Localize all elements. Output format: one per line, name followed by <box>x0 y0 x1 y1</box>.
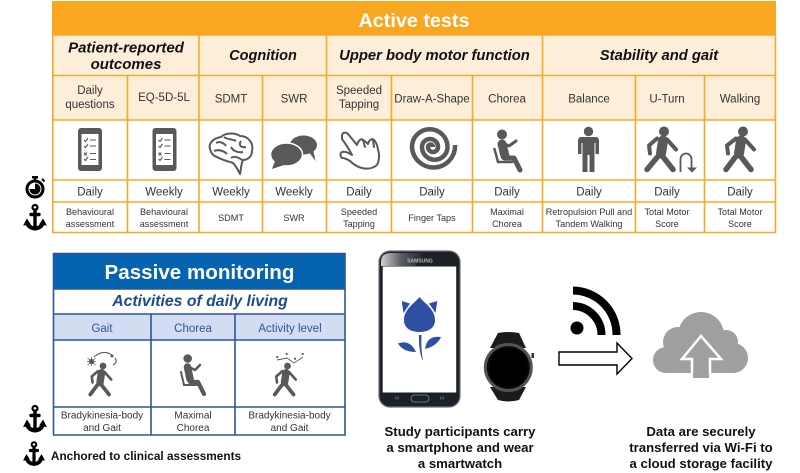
icon: tapping hand <box>340 133 379 169</box>
test frequency row: Daily <box>727 186 753 198</box>
test names: Daily <box>77 85 103 97</box>
anchor assessments: and Gait <box>83 423 121 434</box>
test frequency row: Daily <box>77 186 103 198</box>
clinical anchor row: assessment <box>140 219 189 229</box>
clinical anchor row: Maximal <box>490 207 524 217</box>
column headings <box>91 323 322 335</box>
icon: wi-fi <box>570 290 617 335</box>
icon: anchor, active tests <box>24 205 46 228</box>
icon: gait with dizziness marks <box>87 352 116 394</box>
category headings: Patient-reported <box>68 40 185 56</box>
anchor assessments: Bradykinesia-body <box>248 410 331 422</box>
clinical anchor row: Total Motor <box>645 207 689 217</box>
phone brand: SAMSUNG <box>407 258 433 264</box>
icon: smartwatch <box>485 332 534 402</box>
test names: SWR <box>281 94 307 106</box>
tulip logo <box>398 297 441 361</box>
anchor assessments: Maximal <box>174 410 212 422</box>
category headings: outcomes <box>91 56 161 73</box>
caption: data transfer: a cloud storage facility <box>630 456 773 471</box>
column heading background <box>54 314 344 340</box>
category headings: Upper body motor function <box>339 48 530 64</box>
test names: Speeded <box>336 85 382 97</box>
test names: Draw-A-Shape <box>394 94 470 106</box>
test frequency row: Daily <box>419 186 445 198</box>
legend: anchored to clinical assessments <box>24 442 242 464</box>
test frequency row: Weekly <box>145 186 183 198</box>
clinical anchor row: Finger Taps <box>408 213 456 223</box>
icon: phone checklist, EQ-5D-5L <box>152 128 176 171</box>
anchor assessments: Bradykinesia-body <box>61 410 143 422</box>
icon: cloud upload <box>653 312 748 378</box>
anchor assessments <box>61 410 331 434</box>
column headings: Chorea <box>174 323 212 335</box>
test frequency row: Daily <box>494 186 520 198</box>
icon: phone checklist, daily questions <box>78 128 102 171</box>
test names <box>65 85 760 111</box>
icon: standing person, balance <box>578 127 599 172</box>
test frequency row <box>77 186 753 198</box>
arrow to cloud <box>559 343 632 374</box>
clinical anchor row: Total Motor <box>718 207 762 217</box>
anchor assessments: and Gait <box>271 423 309 434</box>
category and test name background <box>53 35 775 120</box>
caption: data transfer: transferred via Wi-Fi to <box>629 440 773 455</box>
test names: Walking <box>720 94 760 106</box>
test names: questions <box>65 99 115 111</box>
clinical anchor row: Behavioural <box>140 207 188 217</box>
panel: passive monitoring <box>53 253 345 435</box>
test names: Balance <box>568 94 610 106</box>
test frequency row: Daily <box>346 186 372 198</box>
icon: walking person <box>726 126 754 170</box>
clinical anchor row: Chorea <box>492 219 523 229</box>
icon: seated person <box>181 354 204 394</box>
active tests header band <box>52 1 776 35</box>
clinical anchor row: Tandem Walking <box>556 219 622 229</box>
test frequency row: Daily <box>576 186 602 198</box>
heading: passive monitoring: Passive monitoring <box>105 261 294 284</box>
category headings: Stability and gait <box>600 48 719 64</box>
icon: activity level person <box>275 353 304 394</box>
clinical anchor row: Score <box>728 219 752 229</box>
clinical anchor row: SWR <box>283 213 305 223</box>
category headings: Cognition <box>229 48 297 64</box>
caption: data transfer <box>629 424 773 471</box>
clinical anchor row: assessment <box>66 219 115 229</box>
clinical anchor row: Tapping <box>343 219 375 229</box>
test names: SDMT <box>215 94 247 106</box>
test names: Chorea <box>488 94 526 106</box>
caption: study participants: Study participants carry <box>385 424 536 439</box>
test frequency row: Weekly <box>212 186 250 198</box>
test frequency row: Daily <box>654 186 680 198</box>
icon: speech bubbles <box>270 136 317 169</box>
icon: stopwatch <box>27 176 44 197</box>
caption: data transfer: Data are securely <box>646 424 756 439</box>
icon: walking person with U-turn arrow <box>647 126 697 172</box>
icon: anchor, legend <box>24 442 44 464</box>
anchor assessments: Chorea <box>177 423 210 434</box>
clinical anchor row: Behavioural <box>66 207 114 217</box>
heading: active tests: Active tests <box>358 10 470 32</box>
subheading: activities of daily living: Activities of daily living <box>111 293 288 310</box>
icon: brain <box>210 134 252 174</box>
column headings: Gait <box>91 323 113 335</box>
clinical anchor row: Retropulsion Pull and <box>546 207 632 217</box>
test names: Tapping <box>339 99 379 111</box>
icon: seated person, chorea <box>494 130 520 170</box>
caption: study participants: a smartphone and wear <box>386 440 534 455</box>
legend text: Anchored to clinical assessments <box>51 449 242 463</box>
test frequency row: Weekly <box>275 186 313 198</box>
clinical anchor row: SDMT <box>218 213 244 223</box>
column headings: Activity level <box>258 323 322 335</box>
passive monitoring header band <box>53 253 345 289</box>
icon: anchor, passive monitoring <box>24 406 46 430</box>
caption: study participants: a smartwatch <box>418 456 502 471</box>
test names: U-Turn <box>649 94 685 106</box>
icon: spiral <box>412 129 455 167</box>
clinical anchor row <box>66 207 762 229</box>
caption: study participants <box>385 424 536 471</box>
category headings <box>68 40 719 73</box>
clinical anchor row: Score <box>655 219 679 229</box>
clinical anchor row: Speeded <box>341 207 377 217</box>
icon: smartphone with tulip logo <box>379 251 460 407</box>
test names: EQ-5D-5L <box>138 92 190 104</box>
panel: active tests <box>52 1 776 232</box>
